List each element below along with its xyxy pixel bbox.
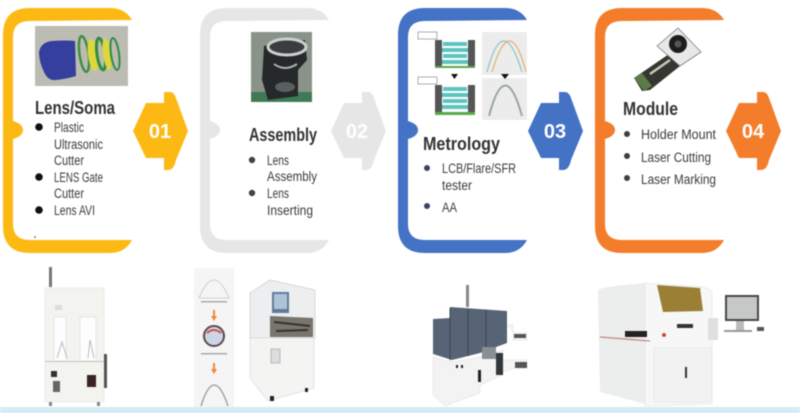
badge 02: [331, 92, 386, 170]
badge 02: 02: [346, 121, 368, 143]
bullet list: Ultrasonic: [54, 137, 103, 152]
bullet list: LENS Gate: [54, 170, 103, 185]
badge 01: 01: [149, 121, 171, 143]
panel: Assembly: [200, 8, 386, 253]
badge 01: [133, 92, 188, 170]
machine: Module equipment: [598, 283, 764, 406]
image: lens holder: [251, 32, 312, 102]
bullet list: Cutter: [54, 186, 84, 201]
machine: Lens/Soma equipment: [45, 267, 107, 406]
badge 03: 03: [544, 121, 566, 143]
bullet list: [34, 120, 103, 238]
bullet list: Plastic: [54, 120, 84, 135]
bullet list: Lens AVI: [54, 203, 95, 218]
bullet list: Holder Mount: [641, 127, 716, 142]
bullet list: tester: [442, 178, 472, 193]
bullet list: Laser Cutting: [641, 150, 711, 165]
badge 04: [726, 92, 781, 170]
bullet list: [249, 153, 317, 218]
heading: Module: [623, 99, 678, 119]
heading: Lens/Soma: [35, 98, 116, 118]
bullet list: [624, 127, 716, 187]
bracket: orange: [595, 8, 724, 253]
bullet list: Laser Marking: [641, 172, 716, 187]
bullet list: Lens: [267, 153, 289, 168]
panel: Metrology: [398, 8, 583, 253]
heading: Assembly: [249, 125, 317, 145]
bullet list: AA: [442, 200, 457, 215]
bullet list: Inserting: [267, 203, 313, 218]
machine: Assembly equipment: [250, 280, 315, 401]
bullet list: [424, 161, 516, 215]
bracket: blue: [398, 8, 527, 253]
image: camera module: [634, 28, 701, 91]
panel: Lens/Soma: [3, 8, 188, 253]
badge 03: [528, 92, 583, 170]
panel: Module: [595, 8, 781, 253]
bracket: gray: [200, 8, 329, 253]
machine: Metrology equipment: [433, 285, 527, 406]
heading: Metrology: [423, 134, 500, 154]
bracket: yellow: [3, 8, 132, 253]
bullet list: LCB/Flare/SFR: [442, 161, 516, 176]
badge 04: 04: [742, 121, 765, 143]
bullet list: Lens: [267, 186, 289, 201]
bullet list: Cutter: [54, 153, 84, 168]
bullet list: Assembly: [267, 169, 317, 184]
footer band: [0, 407, 800, 413]
image: metrology diagrams: [418, 32, 527, 120]
image: lens parts: [35, 26, 128, 86]
diagram: Assembly process strip: [194, 268, 234, 407]
